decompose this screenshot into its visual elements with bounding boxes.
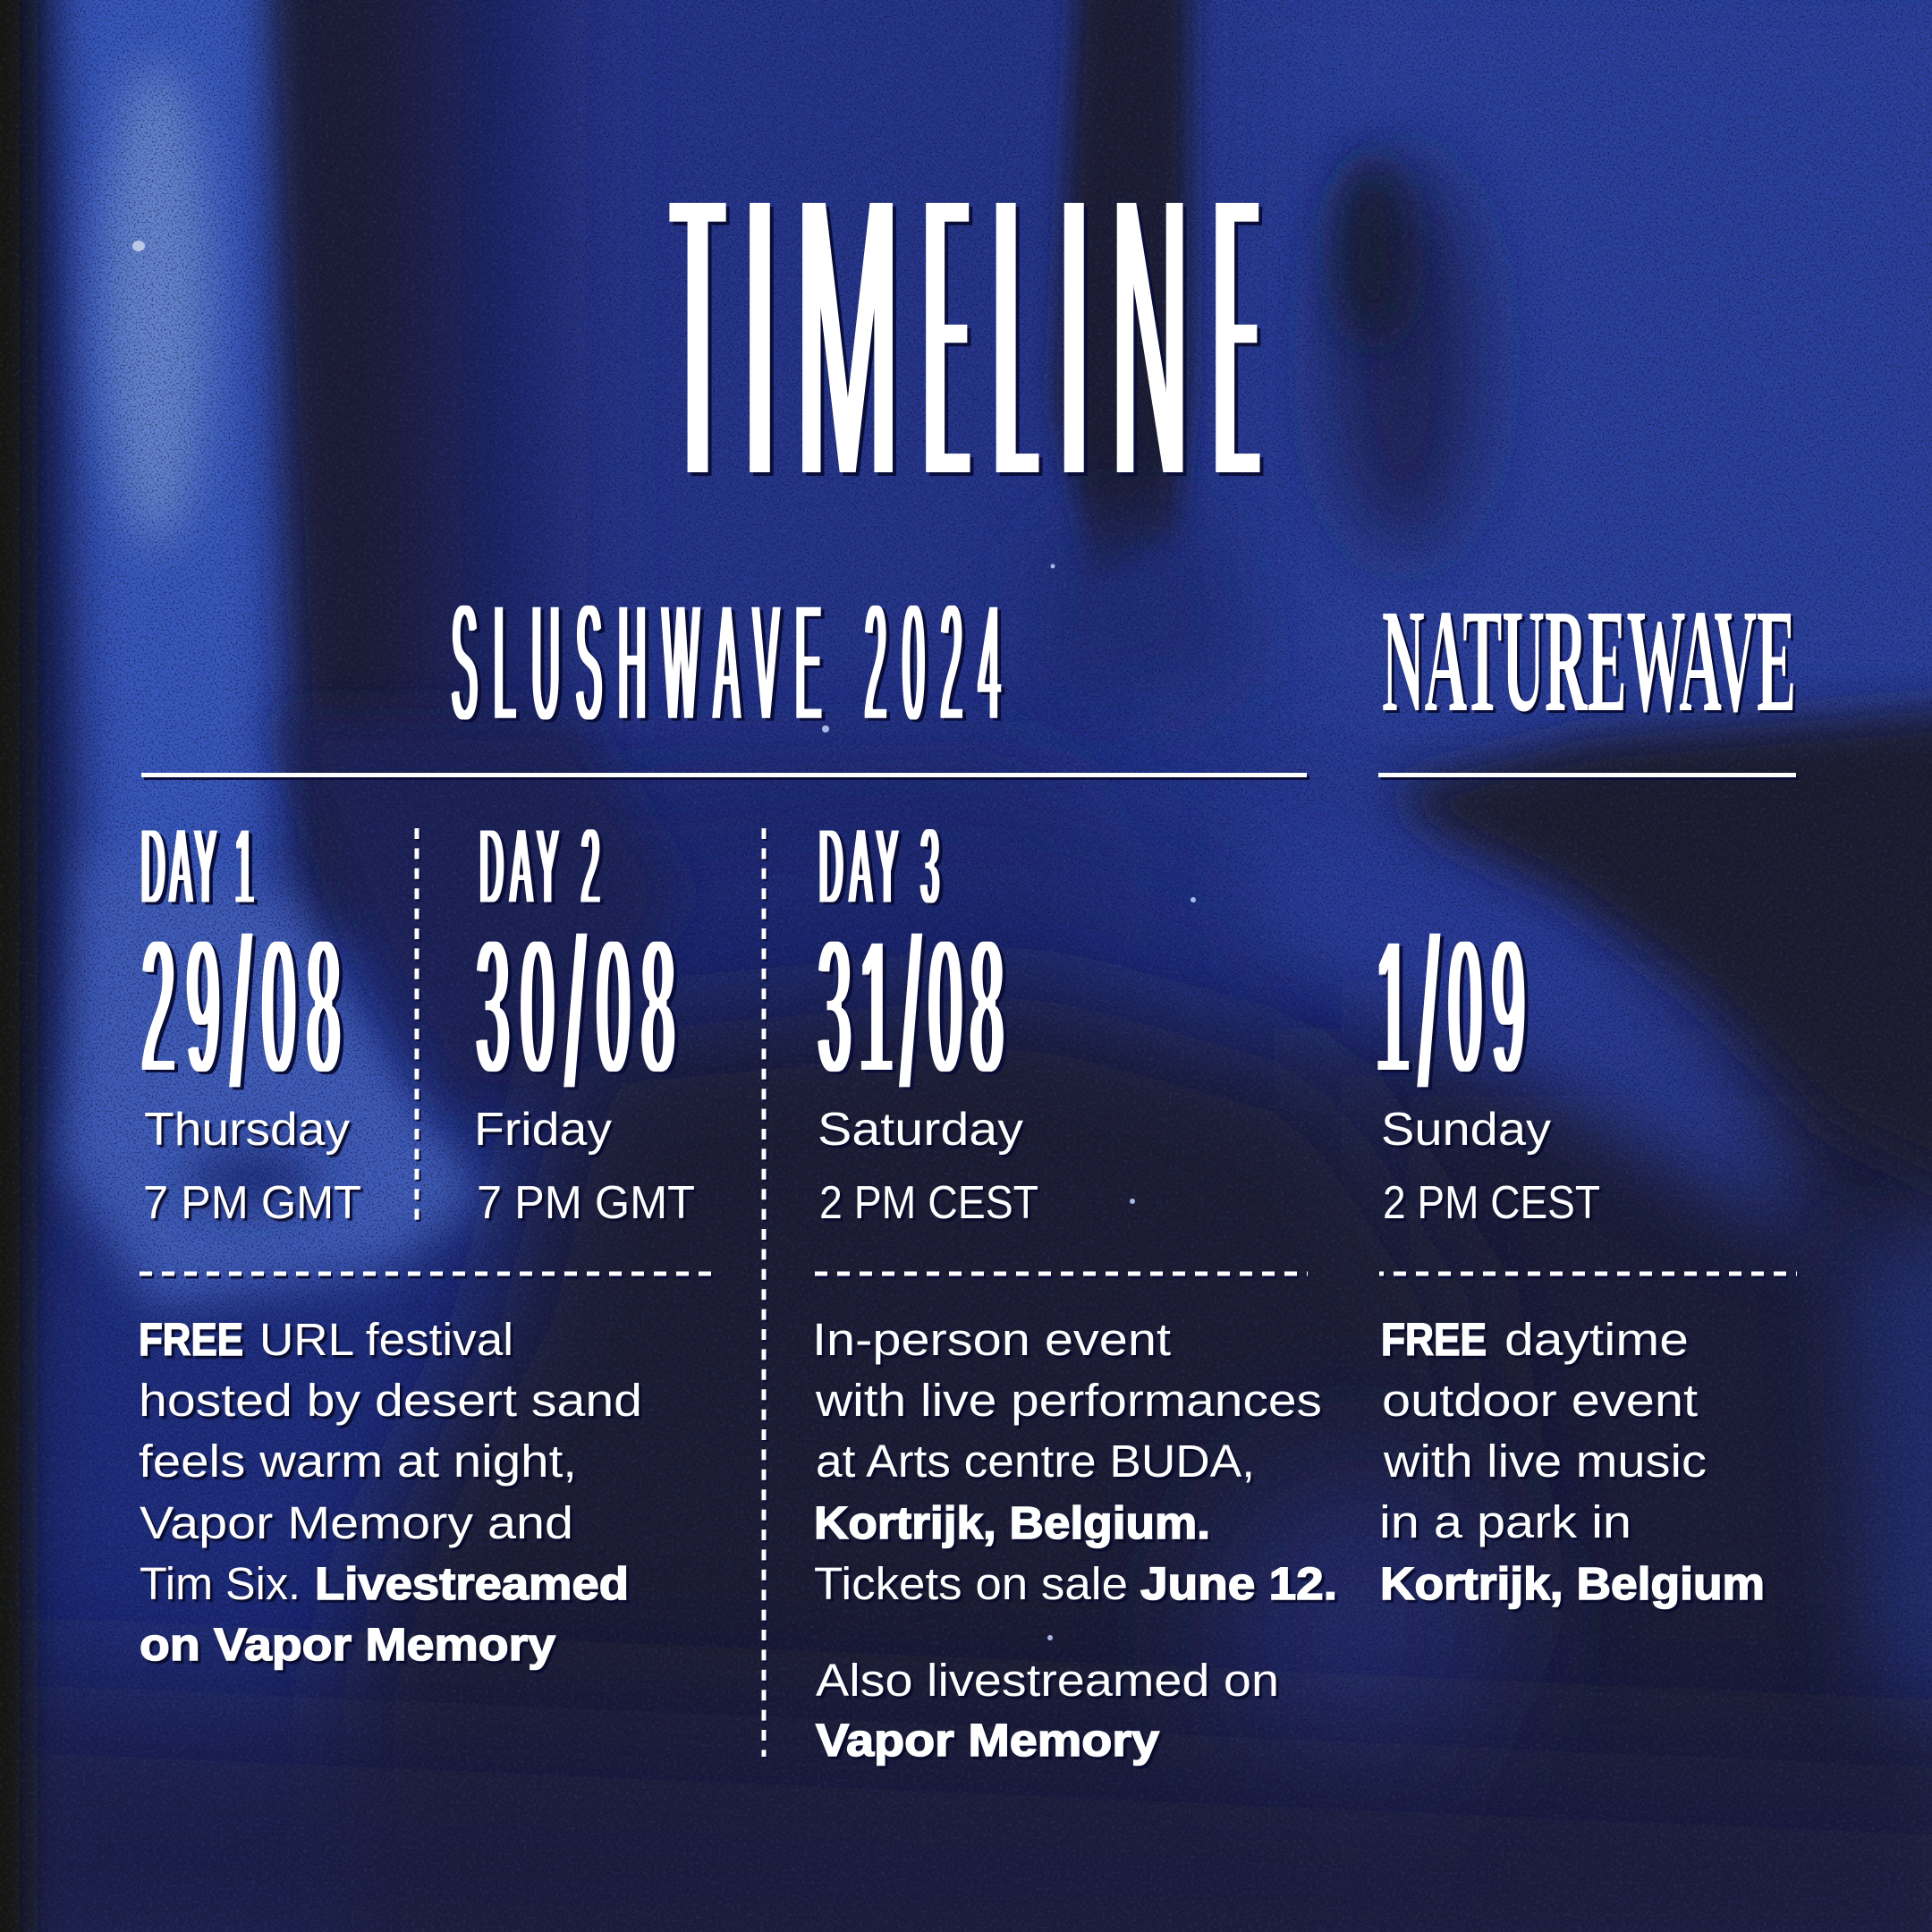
text block: day 3 description: Kortrijk, Belgium. [814,1497,1210,1548]
day 4 weekday: Sunday [1381,1104,1551,1156]
panel: day 1 [141,805,361,1229]
title [674,108,1256,566]
title: E [928,108,966,566]
day 1 weekday: Thursday [144,1104,350,1156]
day 1 time: 7 PM GMT [143,1177,361,1229]
day 4 time: 2 PM CEST [1383,1177,1600,1229]
text block: day 4 description: outdoor event [1382,1375,1698,1426]
day 4 date: 09 [1449,901,1536,1114]
day 2 label: DAY 2 [479,805,606,927]
title: M [796,108,899,566]
dashed rule: day 3 [815,1274,1309,1276]
text block: days 1 and 2 description: FREE [139,1314,243,1365]
text block: days 1 and 2 description: feels warm at night, [139,1436,577,1487]
vertical divider: day 2 and day 3 [764,828,766,1758]
day 2 date: 30 [477,901,566,1114]
day 4 date: 1 [1377,901,1419,1114]
title: T [674,108,721,566]
text block: days 1 and 2 description: URL festival [259,1314,513,1365]
text: E [1218,108,1256,566]
day 2 time: 7 PM GMT [477,1177,695,1229]
text block: days 1 and 2 description: Vapor Memory and [140,1497,573,1548]
text block: days 1 and 2 description [139,1314,642,1670]
day 3 date: / [902,892,929,1133]
day 3 label: DAY 3 [819,805,946,927]
day 1 date: 08 [263,901,352,1114]
day 2 weekday: Friday [474,1104,612,1156]
text block: day 4 description: with live music [1383,1436,1707,1487]
heading: Slushwave 2024: SLUSHWAVE 2024 [452,570,1017,756]
rule: Naturewave [1378,773,1799,780]
text block: day 3 description: Tickets on sale [814,1558,1128,1609]
day 1 date [142,892,352,1133]
text block: day 4 description: daytime [1504,1314,1689,1365]
text block: day 3 description: June 12. [1140,1558,1337,1609]
title: L [997,108,1034,566]
text: N [1113,108,1187,566]
text block: day 3 description: Also livestreamed on [816,1655,1279,1706]
title: M [796,108,899,566]
text block: day 3 description: Vapor Memory [816,1715,1160,1766]
text block: day 3 description: at Arts centre BUDA, [816,1436,1255,1487]
text block: days 1 and 2 description: on Vapor Memory [140,1619,556,1670]
text block: day 4 description: Kortrijk, Belgium [1380,1558,1765,1609]
text block: day 3 description [812,1314,1337,1766]
panel: day 3 [818,805,1038,1229]
day 1 date: 29 [142,901,232,1114]
text block: day 4 description: FREE [1381,1314,1487,1365]
day 1 date: / [232,892,263,1133]
day 4 date: / [1419,892,1449,1133]
day 3 time: 2 PM CEST [819,1177,1038,1229]
text block: day 4 description: in a park in [1379,1496,1631,1547]
day 3 date [818,892,1013,1133]
text block: days 1 and 2 description: hosted by desert sand [139,1375,642,1426]
day 4 date [1377,892,1536,1133]
day 2 date: / [566,892,597,1133]
rule: Slushwave [141,773,1309,780]
dashed rule: days 1 and 2 [140,1274,721,1276]
text block: day 3 description: In-person event [812,1314,1171,1365]
panel: day 4 [1377,892,1600,1229]
text block: day 4 description [1379,1314,1765,1609]
text block: days 1 and 2 description: Tim Six. [140,1558,301,1609]
day 2 date [477,892,687,1133]
title: I [750,108,770,566]
day 2 date: 08 [597,901,687,1114]
day 3 date: 31 [818,901,902,1114]
text block: days 1 and 2 description: Livestreamed [315,1558,629,1609]
text: N [1113,108,1187,566]
text block: day 3 description: with live performances [815,1375,1322,1426]
day 1 label: DAY 1 [141,805,258,927]
day 3 date: 08 [929,901,1013,1114]
dashed rule: day 4 [1379,1274,1799,1276]
panel: day 2 [474,805,695,1229]
vertical divider: day 1 and day 2 [417,828,419,1225]
day 3 weekday: Saturday [818,1104,1023,1156]
title: I [1064,108,1083,566]
